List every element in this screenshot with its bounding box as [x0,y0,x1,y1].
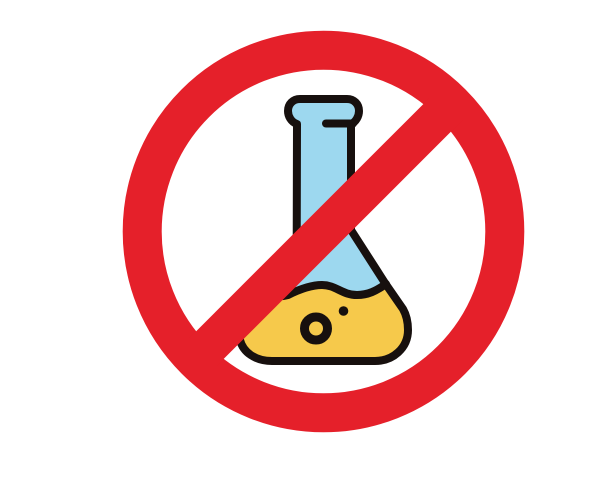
flask yellow liquid [239,284,408,361]
large bubble [304,317,328,340]
icon: red prohibition symbol [142,50,505,413]
small bubble [339,306,348,316]
flask lip inner line [326,120,353,128]
flask outline [239,99,408,361]
flask glass body [239,99,408,361]
red diagonal bar [196,104,452,360]
red ring [142,50,505,413]
liquid surface line [265,284,386,296]
icon: chemical flask [239,99,408,361]
